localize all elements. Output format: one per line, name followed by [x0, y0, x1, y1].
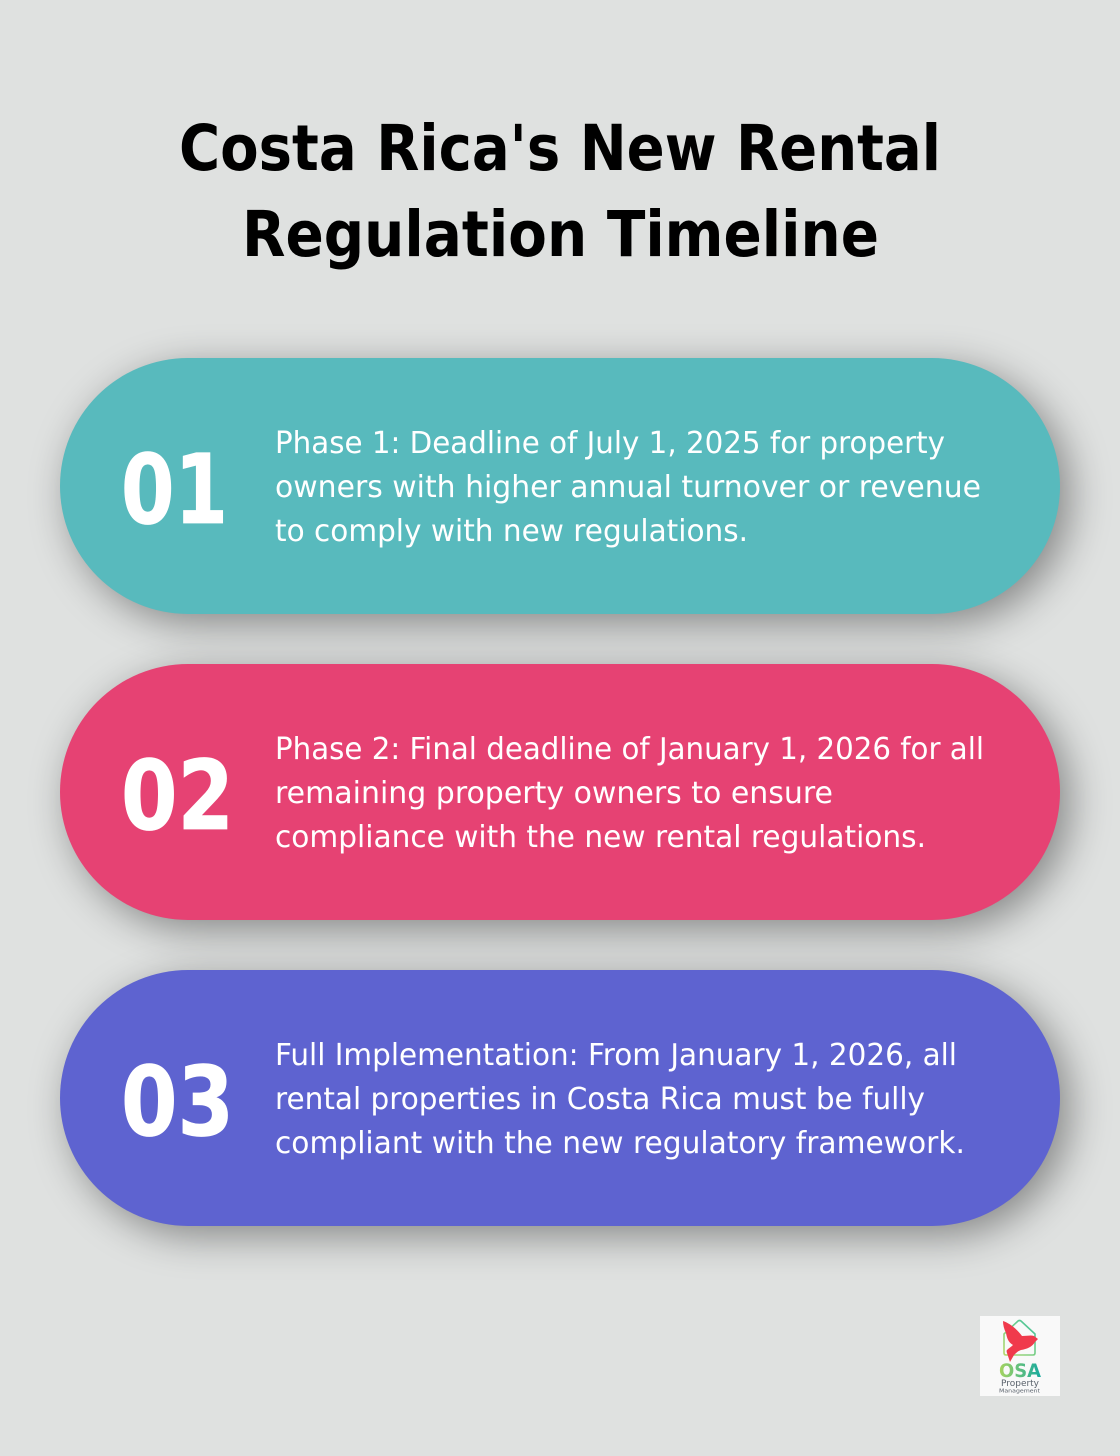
full implementation description — [275, 1038, 965, 1161]
title — [179, 112, 941, 271]
icon: red bird — [1003, 1321, 1038, 1362]
phase 2 description: compliance with the new rental regulations. — [275, 820, 926, 855]
logo: OSA Property Management — [980, 1316, 1060, 1396]
number 02: 02 — [121, 740, 234, 852]
full implementation description: rental properties in Costa Rica must be fully — [275, 1082, 925, 1117]
phase 2 description: remaining property owners to ensure — [275, 776, 833, 811]
full implementation description: compliant with the new regulatory framework. — [275, 1126, 965, 1161]
phase 1 description: to comply with new regulations. — [275, 514, 748, 549]
panel: full implementation — [60, 970, 1060, 1226]
panel: phase 1 — [60, 358, 1060, 614]
phase 2 description: Phase 2: Final deadline of January 1, 2026 for all — [275, 732, 984, 767]
phase 1 description: Phase 1: Deadline of July 1, 2025 for property — [275, 426, 945, 461]
panel: phase 2 — [60, 664, 1060, 920]
wordmark: Property: Property — [1001, 1379, 1040, 1389]
phase 1 description — [275, 426, 981, 549]
wordmark: Management: Management — [999, 1388, 1041, 1394]
phase 1 description: owners with higher annual turnover or revenue — [275, 470, 981, 505]
title: Regulation Timeline — [242, 198, 879, 271]
phase 2 description — [275, 732, 984, 855]
number 01: 01 — [121, 434, 228, 546]
title: Costa Rica's New Rental — [179, 112, 941, 185]
wordmark: OSA: OSA — [999, 1360, 1041, 1382]
number 03: 03 — [121, 1046, 234, 1158]
full implementation description: Full Implementation: From January 1, 2026, all — [275, 1038, 957, 1073]
icon: house outline — [1004, 1320, 1035, 1355]
